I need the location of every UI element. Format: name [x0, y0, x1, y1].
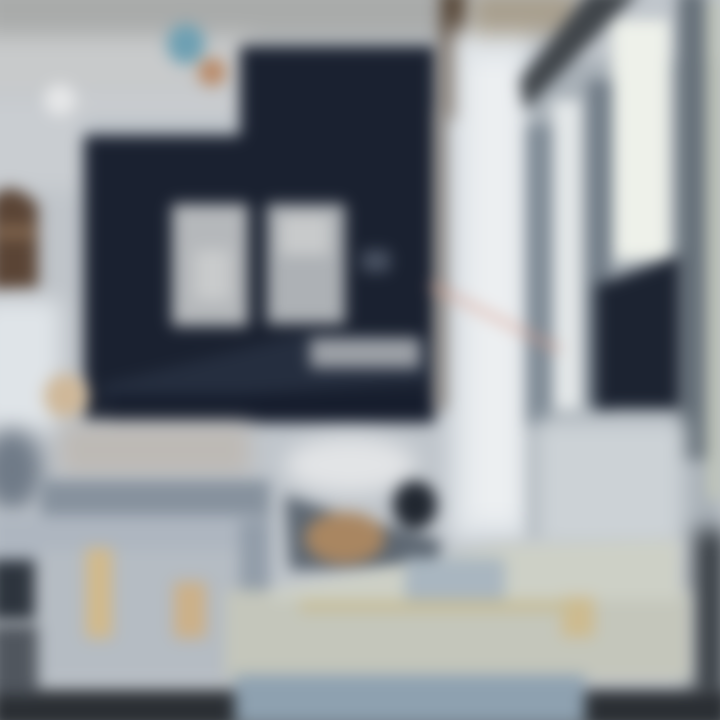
cushion and ottoman: [285, 481, 440, 570]
colour accent on ceiling: [167, 24, 226, 86]
ceiling light bar: [44, 84, 240, 116]
wall sconce light: [310, 250, 420, 368]
wooden beam: [436, 0, 468, 410]
lower left wall: [0, 300, 60, 430]
bed: [0, 480, 270, 680]
red accent line: [430, 285, 560, 350]
dark panel in window: [596, 255, 680, 410]
dark feature wall: [84, 46, 436, 423]
bedside lamp: [44, 374, 88, 418]
wall art: left frame: [172, 204, 248, 326]
ceiling: [0, 0, 460, 430]
rug: [225, 540, 690, 680]
brown arch niche: [0, 189, 38, 290]
window mullions: [528, 0, 720, 500]
wall art: right frame: [267, 204, 345, 324]
window area: [520, 0, 720, 540]
curtain: [450, 0, 580, 540]
floor: [0, 625, 720, 720]
bed legs / amber accents: [86, 548, 206, 638]
right furniture: [535, 420, 720, 700]
headboard and pillows: [0, 425, 415, 510]
